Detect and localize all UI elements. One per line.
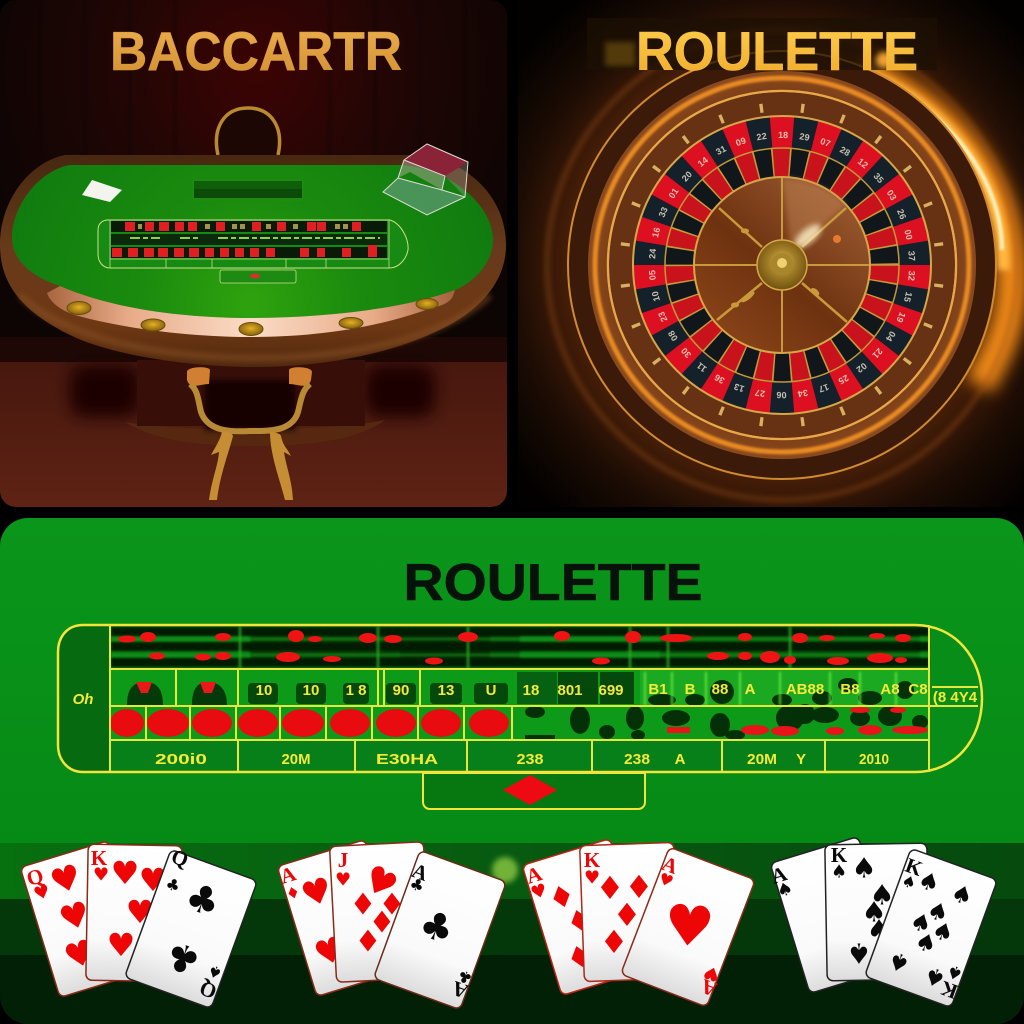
bottom row labels: A — [675, 751, 686, 768]
grid lines — [58, 625, 982, 772]
panel: betting layout and cards — [0, 518, 1024, 1024]
hand: diamonds and heart ace: ♦ — [562, 901, 598, 943]
card on table — [82, 180, 122, 202]
spoke glow — [791, 220, 841, 252]
panel: baccarat table — [0, 0, 507, 507]
bottom row labels: 200i0 — [155, 751, 207, 768]
betting grid — [58, 625, 982, 772]
hand: hearts and clubs: ♥ — [111, 854, 139, 892]
hand: spades: ♠ — [899, 871, 919, 893]
panel: roulette wheel — [518, 0, 1024, 507]
bottom row labels: E30HA — [376, 751, 438, 768]
outline — [58, 625, 982, 772]
row numbers: AB88 — [786, 681, 824, 698]
curtain stripes — [40, 0, 465, 337]
hand: diamonds and heart ace: ♦ — [544, 877, 580, 919]
top row — [111, 626, 929, 669]
hand: spades — [768, 837, 997, 1008]
bottom row labels: 20M — [282, 751, 310, 768]
hand: diamonds and heart ace: ♦ — [562, 937, 598, 979]
hand: hearts, diamonds and clubs: ♦ — [350, 888, 376, 922]
hand: spades: ♠ — [923, 895, 953, 929]
hub — [757, 240, 807, 290]
coins — [67, 298, 438, 336]
title: ROULETTE: ROULETTE — [636, 20, 918, 82]
hand: hearts and clubs: ♥ — [55, 893, 95, 941]
pedestal and stand — [70, 360, 435, 500]
pocket numbers: 32 15 19 04 21 02 25 17 34 06 27 13 36 11 30 08 23 10 05 24 16 33 01 20 14 31 09 22 18 29 07 28 12 35 03 26 00 37 — [648, 132, 916, 398]
row numbers: B1 — [648, 681, 668, 698]
card slot — [194, 181, 302, 198]
row numbers: 13 — [438, 682, 454, 699]
title glow — [605, 42, 892, 68]
hand: hearts and clubs: ♥ — [93, 864, 109, 886]
hand: hearts and clubs: ♥ — [126, 893, 154, 931]
hand: hearts, diamonds and clubs: A — [448, 976, 471, 1004]
hand: hearts, diamonds and clubs: ♥ — [356, 857, 404, 909]
cone highlight — [782, 178, 846, 255]
title band — [587, 18, 937, 70]
hand: hearts, diamonds and clubs: ♥ — [297, 869, 337, 917]
hand: spades: ♠ — [914, 865, 944, 899]
hand: hearts, diamonds and clubs: J — [338, 848, 348, 872]
row numbers: 1 8 — [346, 682, 366, 699]
felt bands — [0, 843, 1024, 1024]
hand: hearts and clubs: Q — [168, 844, 192, 872]
hand: spades: ♠ — [869, 878, 895, 912]
hand: hearts, diamonds and clubs: ♣ — [455, 966, 475, 988]
row numbers: 18 — [523, 682, 539, 699]
left zero cell — [58, 625, 110, 772]
hand: diamonds and heart ace: ♥ — [528, 880, 550, 904]
hand: spades: ♠ — [906, 906, 936, 940]
row numbers: 90 — [393, 682, 409, 699]
hand: spades: ♠ — [928, 915, 958, 949]
chair back — [190, 384, 310, 431]
row numbers — [256, 681, 928, 699]
hand: diamonds and heart ace: ♥ — [661, 892, 717, 962]
hand: hearts, diamonds and clubs: ♦ — [355, 924, 381, 960]
hand: hearts, diamonds and clubs: ♥ — [310, 928, 350, 976]
mini bet box — [220, 270, 296, 283]
row numbers: B8 — [840, 681, 860, 698]
hand: hearts and clubs: ♣ — [159, 931, 207, 985]
hand: hearts, diamonds and clubs: A — [277, 861, 300, 889]
row numbers: B — [685, 681, 696, 698]
hand: spades: ♠ — [920, 960, 950, 994]
row numbers: 88 — [712, 681, 728, 698]
hand: spades: ♠ — [866, 914, 892, 946]
card shoe — [383, 144, 468, 215]
hand: hearts and clubs: ♠ — [205, 961, 225, 983]
hand: diamonds and heart ace: A — [523, 861, 546, 889]
bottom row labels: 238 — [516, 751, 544, 768]
hand: hearts and clubs: ♥ — [60, 931, 100, 979]
hand: hearts and clubs: ♣ — [163, 874, 183, 896]
rail highlight — [20, 295, 490, 358]
cushion rim — [47, 286, 455, 337]
number ring — [633, 116, 931, 414]
chair pads — [187, 367, 312, 386]
spoke beads — [731, 228, 821, 308]
row numbers: A — [745, 681, 756, 698]
floor — [0, 337, 507, 507]
hand: hearts and clubs: Q — [196, 976, 220, 1004]
hand: diamonds and heart ace: ♥ — [656, 869, 676, 891]
bottom row labels: 238 — [624, 751, 650, 768]
hand: spades: ♠ — [861, 896, 887, 928]
hand: diamonds and heart ace: A — [659, 851, 682, 879]
right end label: (8 4Y4 — [933, 689, 978, 706]
hand: hearts, diamonds and clubs: ♦ — [379, 888, 405, 922]
bottom row labels: 20M — [747, 751, 777, 768]
hand: diamonds and heart ace: ♦ — [600, 923, 628, 961]
hand: spades: K — [831, 843, 848, 867]
hand: hearts and clubs: ♥ — [46, 856, 86, 904]
hand: diamonds and heart ace: ♦ — [596, 869, 624, 907]
bet box with diamond — [423, 773, 645, 809]
hand: diamonds and heart ace: ♥ — [701, 960, 723, 986]
hand: hearts and clubs: Q — [24, 863, 46, 891]
wheel cone — [694, 177, 870, 353]
hand: hearts and clubs: ♥ — [107, 926, 135, 964]
hand: spades: ♠ — [911, 926, 941, 960]
row numbers: 10 — [303, 682, 319, 699]
hand: spades: K — [937, 976, 961, 1004]
outer rings — [568, 51, 996, 479]
spokes — [695, 178, 869, 352]
chair legs — [209, 432, 293, 500]
hand: spades: ♠ — [846, 936, 872, 970]
glowing rim rings — [595, 78, 969, 452]
hand: spades: A — [768, 861, 791, 889]
hand: hearts, diamonds and clubs: A — [409, 858, 432, 886]
bottom row labels: Y — [796, 751, 806, 768]
row numbers: U — [486, 682, 496, 699]
gold markers — [624, 107, 940, 423]
hand: spades: ♠ — [947, 878, 977, 912]
hand: spades: ♠ — [774, 878, 796, 902]
hand: spades: ♠ — [831, 862, 847, 882]
hand: hearts, diamonds and clubs: ♦ — [283, 882, 303, 904]
hand: diamonds and heart ace: ♥ — [584, 868, 600, 888]
hand: hearts, diamonds and clubs: ♥ — [335, 870, 351, 890]
green felt — [12, 165, 493, 318]
hand: diamonds and heart ace: A — [697, 974, 720, 1002]
row numbers: C8 — [908, 681, 928, 698]
hand: hearts, diamonds and clubs: ♣ — [407, 874, 427, 896]
hand: hearts and clubs: ♥ — [31, 881, 53, 905]
hand: hearts and clubs: ♣ — [179, 873, 227, 927]
glow arcs — [547, 30, 1017, 500]
bottom row labels — [111, 741, 929, 772]
hand: diamonds and heart ace: ♦ — [625, 868, 653, 906]
hand: spades: ♠ — [851, 852, 877, 884]
bottom row labels: 2010 — [859, 751, 889, 768]
title: BACCARTR: BACCARTR — [110, 20, 402, 82]
hand: hearts, diamonds and clubs — [277, 840, 506, 1010]
table wood rail — [0, 155, 506, 367]
zero label: Oh — [73, 691, 93, 708]
hand: diamonds and heart ace: K — [584, 848, 601, 872]
hand: spades: ♠ — [884, 945, 914, 979]
row numbers: A8 — [880, 681, 900, 698]
row numbers: 801 — [557, 682, 583, 699]
table handle — [216, 108, 280, 155]
hand: hearts, diamonds and clubs: ♦ — [369, 906, 395, 940]
hand: hearts and clubs: ♥ — [139, 861, 167, 899]
hand: hearts and clubs: K — [91, 846, 108, 870]
hand: spades: ♠ — [944, 959, 966, 985]
mini roulette layout — [98, 220, 408, 283]
hand: diamonds and heart ace — [522, 839, 755, 1007]
hand: hearts, diamonds and clubs: ♣ — [413, 900, 461, 954]
hand: diamonds and heart ace: ♦ — [613, 896, 641, 934]
third row red ovals — [110, 704, 929, 740]
hand: hearts and clubs — [20, 841, 257, 1009]
row numbers: 10 — [256, 682, 272, 699]
second row numbers — [111, 670, 929, 706]
row numbers: 699 — [598, 682, 624, 699]
hand: spades: K — [902, 853, 926, 881]
title: ROULETTE: ROULETTE — [404, 554, 702, 612]
